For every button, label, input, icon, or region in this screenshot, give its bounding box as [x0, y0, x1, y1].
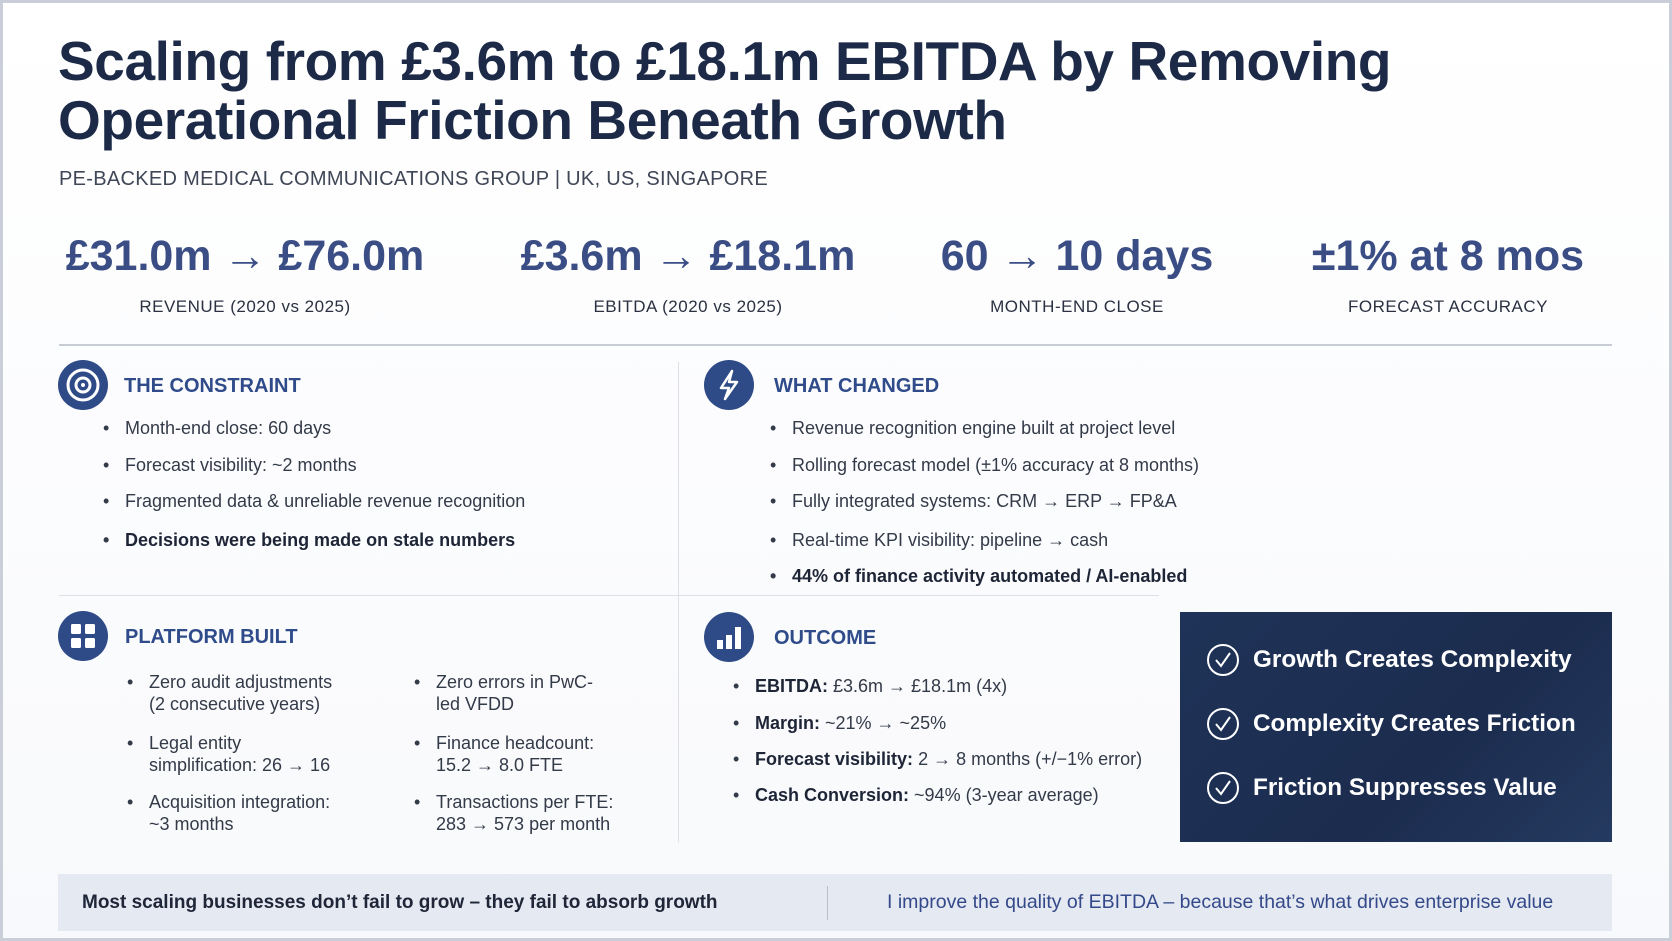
subtitle: PE-BACKED MEDICAL COMMUNICATIONS GROUP | UK, US, SINGAPORE — [59, 168, 768, 190]
panel: platform built: (2 consecutive years) — [149, 694, 320, 714]
bullets — [770, 418, 1199, 586]
icon: lightning — [704, 360, 754, 410]
stat: forecast accuracy: FORECAST ACCURACY — [1348, 297, 1548, 316]
panel: platform built: ~3 months — [149, 814, 234, 834]
stat: month-end close: 60 → 10 days — [941, 232, 1213, 280]
stat: ebitda: EBITDA (2020 vs 2025) — [593, 297, 783, 316]
stat: ebitda — [521, 232, 855, 316]
bullets — [734, 676, 1142, 805]
stat: month-end close: MONTH-END CLOSE — [990, 297, 1164, 316]
footer right text: I improve the quality of EBITDA – because that’s what drives enterprise value — [887, 891, 1553, 913]
bullets col 2 — [414, 672, 613, 834]
panel: the constraint: Forecast visibility: ~2 months — [125, 455, 357, 475]
icon: grid — [58, 611, 108, 661]
bullets — [104, 418, 525, 550]
panel: the constraint — [58, 360, 525, 550]
stat: month-end close — [941, 232, 1213, 316]
panel: outcome — [704, 612, 1142, 805]
title: Scaling from £3.6m to £18.1m EBITDA by Removing — [58, 30, 1391, 92]
panel: what changed — [704, 360, 1199, 586]
panel: outcome: Cash Conversion: ~94% (3-year average) — [755, 785, 1099, 805]
panel: what changed: Rolling forecast model (±1% accuracy at 8 months) — [792, 455, 1199, 475]
panel: platform built: 15.2 → 8.0 FTE — [436, 755, 563, 775]
footer band — [58, 874, 1612, 931]
heading: WHAT CHANGED — [774, 375, 939, 397]
panel: the constraint: Month-end close: 60 days — [125, 418, 331, 438]
panel: platform built: Zero audit adjustments — [149, 672, 332, 692]
title — [58, 30, 1391, 151]
panel: platform built — [58, 611, 613, 834]
panel: what changed: Revenue recognition engine built at project level — [792, 418, 1175, 438]
icon: bar chart — [704, 612, 754, 662]
heading: OUTCOME — [774, 627, 876, 649]
panel: platform built: Acquisition integration: — [149, 792, 330, 812]
stat: forecast accuracy: ±1% at 8 mos — [1312, 232, 1584, 280]
check: complexity: Complexity Creates Friction — [1253, 710, 1576, 737]
panel: the constraint: Fragmented data & unreliable revenue recognition — [125, 491, 525, 511]
heading: THE CONSTRAINT — [124, 375, 301, 397]
panel: platform built: Transactions per FTE: — [436, 792, 613, 812]
panel: platform built: 283 → 573 per month — [436, 814, 610, 834]
panel: what changed: 44% of finance activity automated / AI-enabled — [792, 566, 1187, 586]
panel: what changed: Fully integrated systems: CRM → ERP → FP&A — [792, 491, 1177, 511]
stat: revenue: £31.0m → £76.0m — [66, 232, 424, 280]
check: growth: Growth Creates Complexity — [1253, 646, 1572, 673]
panel: platform built: led VFDD — [436, 694, 514, 714]
icon: target — [58, 360, 108, 410]
stat: revenue — [66, 232, 424, 316]
panel: outcome: Forecast visibility: 2 → 8 months (+/−1% error) — [755, 749, 1142, 769]
panel: outcome: EBITDA: £3.6m → £18.1m (4x) — [755, 676, 1007, 696]
stat: revenue: REVENUE (2020 vs 2025) — [139, 297, 351, 316]
panel: platform built: Zero errors in PwC- — [436, 672, 593, 692]
panel: platform built: Finance headcount: — [436, 733, 594, 753]
callout: dark principles box — [1180, 612, 1612, 842]
heading: PLATFORM BUILT — [125, 626, 298, 648]
panel: outcome: Margin: ~21% → ~25% — [755, 713, 946, 733]
check: friction: Friction Suppresses Value — [1253, 774, 1557, 801]
panel: what changed: Real-time KPI visibility: pipeline → cash — [792, 530, 1108, 550]
stat: forecast accuracy — [1312, 232, 1584, 316]
panel: platform built: simplification: 26 → 16 — [149, 755, 330, 775]
footer left text: Most scaling businesses don’t fail to grow – they fail to absorb growth — [82, 892, 718, 913]
panel: the constraint: Decisions were being made on stale numbers — [125, 530, 515, 550]
panel: platform built: Legal entity — [149, 733, 241, 753]
title: Operational Friction Beneath Growth — [58, 89, 1007, 151]
stat: ebitda: £3.6m → £18.1m — [521, 232, 855, 280]
bullets col 1 — [128, 672, 332, 834]
